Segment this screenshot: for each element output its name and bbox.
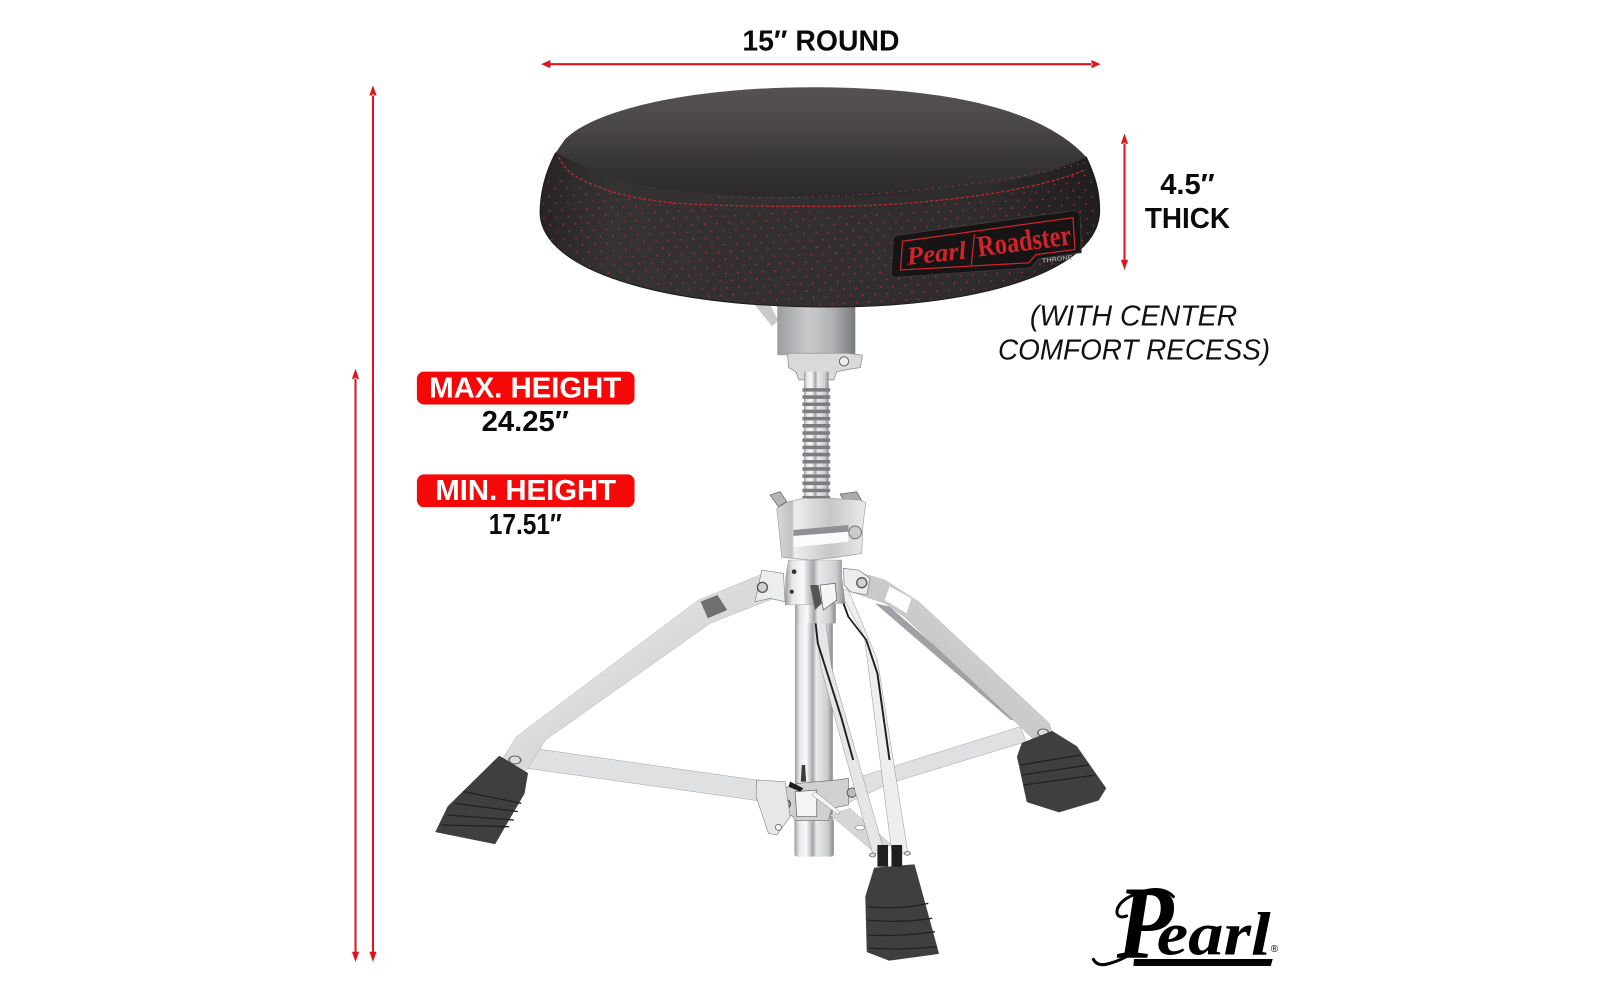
lever	[756, 780, 790, 835]
callout: min height	[417, 474, 635, 540]
perforation dots	[542, 169, 1098, 305]
tube top	[795, 603, 836, 623]
lower hub	[785, 560, 845, 605]
foot: front	[866, 865, 938, 960]
right leg	[851, 570, 1054, 751]
seat badge: Roadster	[975, 219, 1073, 264]
logo: Pearl: earl	[1157, 901, 1272, 969]
lower clamp and front brace	[756, 765, 892, 857]
arrow: seat width	[541, 60, 1101, 68]
note: center comfort recess	[998, 299, 1270, 365]
seat badge: THRONE	[1042, 254, 1073, 265]
center tube	[795, 580, 833, 856]
wing nuts	[770, 492, 787, 507]
dimension: seat thickness	[1121, 133, 1231, 270]
leg bracket: left	[755, 570, 785, 602]
arrow: max height	[369, 85, 377, 962]
label: 4.5 inch thick: 4.5″	[1160, 168, 1215, 200]
logo: Pearl: P	[1116, 866, 1174, 980]
callout: min height: MIN. HEIGHT	[435, 474, 616, 506]
leg bracket: right	[843, 568, 870, 595]
seat side	[540, 123, 1100, 307]
logo: Pearl: ®	[1271, 944, 1279, 955]
foot: left	[436, 757, 527, 843]
dimension: seat thickness: THICK	[1145, 202, 1231, 234]
seat top	[556, 87, 1086, 197]
clamp block	[777, 498, 866, 560]
seat badge: Pearl	[904, 236, 968, 271]
foot: right	[1018, 732, 1105, 812]
label: 15 inch round: 15″ ROUND	[742, 24, 899, 56]
collar	[778, 778, 848, 821]
note: center comfort recess: COMFORT RECESS)	[998, 333, 1270, 365]
callout: max height: MAX. HEIGHT	[429, 371, 621, 403]
seat cushion	[540, 87, 1100, 307]
linkage rods	[812, 590, 910, 867]
drum throne	[436, 87, 1105, 960]
note: center comfort recess: (WITH CENTER	[1030, 299, 1237, 331]
legs and braces	[436, 570, 1105, 960]
callout: min height: 17.51″	[489, 508, 562, 540]
front brace	[830, 808, 892, 852]
arrow: thickness	[1121, 133, 1128, 270]
dimension: seat width	[541, 24, 1101, 68]
callout: max height	[417, 371, 635, 437]
red stitching	[559, 157, 1086, 206]
right leg strut	[875, 603, 1020, 720]
seat badge	[891, 210, 1081, 277]
logo: Pearl	[1093, 866, 1279, 980]
tube foot	[794, 818, 834, 857]
left leg	[499, 572, 783, 778]
rear braces	[527, 749, 758, 801]
height clamp and leg hub	[755, 492, 870, 623]
arrow: min height	[352, 369, 359, 962]
callout: max height: 24.25″	[482, 405, 569, 437]
upper column: post, collar and spring	[755, 304, 862, 507]
